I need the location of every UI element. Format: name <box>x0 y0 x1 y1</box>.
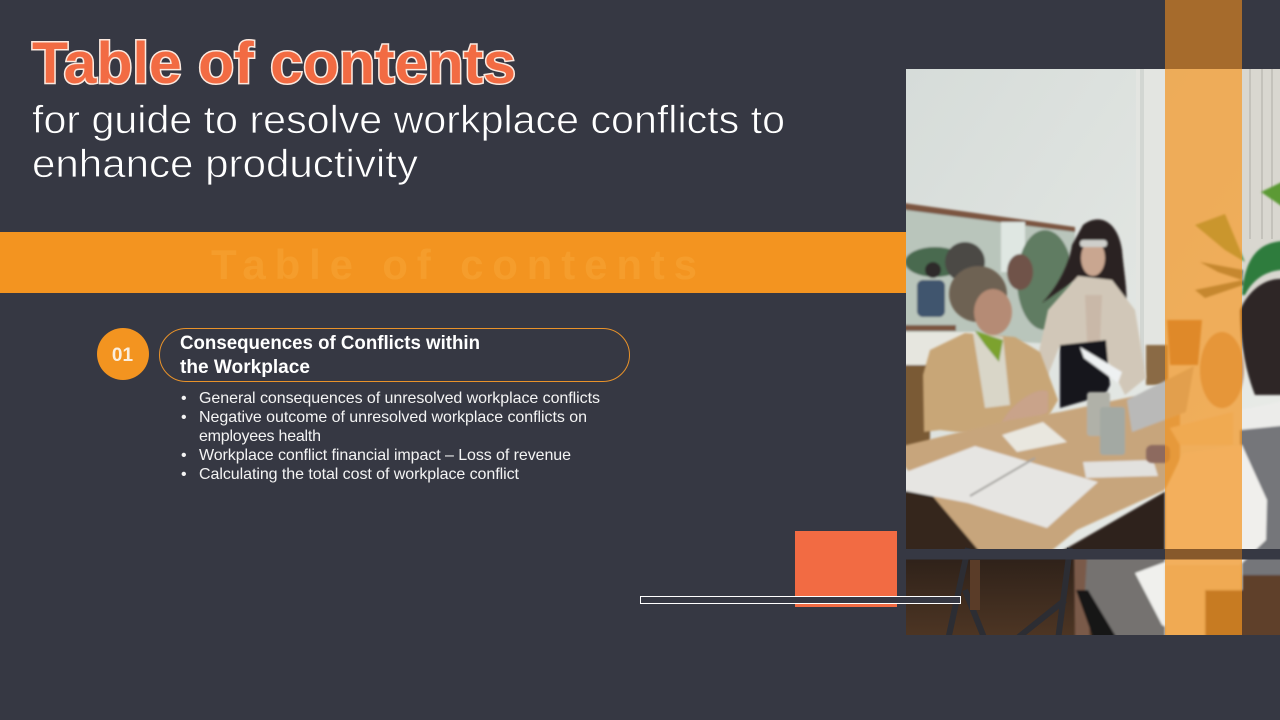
bullet list <box>181 390 600 483</box>
laptop <box>1127 366 1194 432</box>
white outlined bar <box>640 596 960 604</box>
title: Table of contents: Table of contents <box>32 31 516 96</box>
table <box>890 366 1233 552</box>
man seated <box>923 266 1058 436</box>
orange banner with ghost heading: Table of contents <box>211 241 697 288</box>
bullet list: • <box>181 466 187 483</box>
section number badge 01: 01 <box>112 345 133 366</box>
orange banner with ghost heading <box>0 232 906 293</box>
glasses <box>1087 392 1110 436</box>
subtitle: enhance productivity <box>32 143 419 186</box>
woman standing <box>1036 219 1146 408</box>
bullet list: • <box>181 409 187 426</box>
photo: team meeting around a table <box>890 69 1280 645</box>
bullet list: • <box>181 447 187 464</box>
bullet list: Negative outcome of unresolved workplace conflicts on <box>199 409 587 426</box>
section heading pill: Consequences of Conflicts within <box>180 333 480 354</box>
section heading pill <box>160 328 630 382</box>
floor and legs <box>906 560 1094 635</box>
bullet list: • <box>181 390 187 407</box>
subtitle: for guide to resolve workplace conflicts to <box>32 99 785 142</box>
section heading pill: the Workplace <box>180 357 310 378</box>
bullet list: Calculating the total cost of workplace conflict <box>199 466 520 483</box>
person seated at right <box>1074 279 1280 645</box>
bullet list: General consequences of unresolved workplace conflicts <box>199 390 600 407</box>
bullet list: employees health <box>199 428 321 445</box>
bullet list: Workplace conflict financial impact – Loss of revenue <box>199 447 571 464</box>
plant <box>1167 178 1280 365</box>
dark horizontal strip across photo <box>906 549 1280 560</box>
subtitle <box>32 99 785 186</box>
binder <box>890 446 1098 528</box>
section number badge 01 <box>97 328 149 380</box>
translucent orange vertical bar <box>1165 0 1242 635</box>
orange square accent <box>795 531 897 607</box>
